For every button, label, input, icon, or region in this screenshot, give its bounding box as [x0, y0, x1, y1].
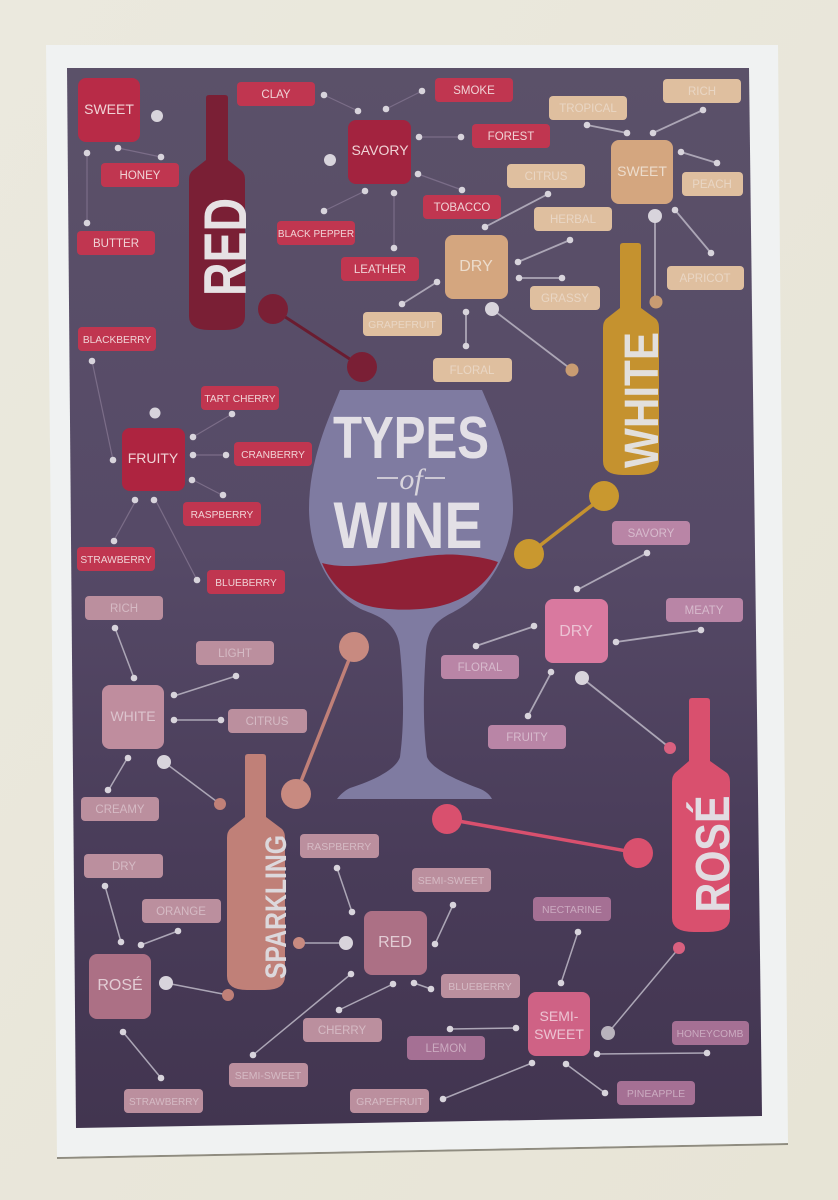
connector: rosé bottle to glass [432, 804, 653, 868]
section: sparkling wines [81, 596, 520, 1113]
tags: red notes: STRAWBERRY [80, 555, 152, 566]
tags: sparkling notes: BLUEBERRY [448, 981, 512, 993]
tags: sparkling notes [81, 596, 520, 1113]
tags: semi-sweet notes: LEMON [426, 1043, 466, 1055]
box: sweet white: SWEET [617, 163, 667, 179]
tags: white notes: GRASSY [541, 293, 589, 305]
tags: sparkling notes: DRY [112, 861, 136, 873]
tags: red notes: CRANBERRY [241, 450, 305, 461]
tags: red notes: CLAY [261, 89, 291, 101]
glass silhouette [309, 390, 513, 799]
box: red sparkling [364, 911, 427, 975]
box: sweet red [78, 78, 140, 142]
tags: red notes: LEATHER [354, 264, 406, 276]
tags: sparkling notes: STRAWBERRY [129, 1097, 199, 1108]
box: semi-sweet: SWEET [534, 1026, 584, 1042]
box: semi-sweet: SEMI- [540, 1008, 579, 1024]
tags: white notes [363, 79, 744, 382]
connectors: white notes [399, 107, 720, 376]
tags: rosé notes [441, 521, 743, 749]
title rules [377, 477, 445, 479]
tags: white notes: TROPICAL [559, 103, 617, 115]
tags: rosé notes: FLORAL [458, 662, 503, 674]
tags: semi-sweet notes: PINEAPPLE [627, 1088, 685, 1100]
tags: white notes: CITRUS [525, 171, 568, 183]
connector: red bottle to glass [258, 294, 377, 382]
tags: red notes: SMOKE [453, 85, 495, 97]
tags: sparkling notes: RASPBERRY [307, 841, 371, 853]
tags: sparkling notes: CITRUS [246, 716, 289, 728]
tags: red notes: TOBACCO [434, 202, 490, 214]
tags: white notes: RICH [688, 86, 716, 98]
bottle: white: WHITE [616, 332, 669, 468]
connector: white bottle to glass [514, 481, 619, 569]
box: savory: SAVORY [351, 142, 409, 158]
tags: white notes: PEACH [692, 179, 732, 191]
tags: red notes: TART CHERRY [204, 394, 276, 405]
connectors: rosé notes [473, 550, 704, 754]
tags: sparkling notes: SEMI-SWEET [235, 1070, 302, 1082]
tags: red notes: BLUEBERRY [215, 578, 277, 589]
section: red wines [77, 78, 550, 594]
title WINE: WINE [334, 488, 482, 562]
card shadow [57, 1144, 788, 1158]
box: red sparkling: RED [378, 934, 412, 951]
bottle: rosé [672, 698, 740, 932]
tags: red notes: BLACK PEPPER [278, 229, 354, 240]
tags: rosé notes: MEATY [685, 605, 724, 617]
wine glass with title [309, 390, 513, 799]
tags: white notes: HERBAL [550, 214, 597, 226]
tags: semi-sweet notes: NECTARINE [542, 904, 602, 916]
tags: sparkling notes: RICH [110, 603, 138, 615]
tags: red notes: BLACKBERRY [83, 335, 151, 346]
box: sweet red: SWEET [84, 101, 134, 117]
box: savory [348, 120, 411, 184]
title TYPES: TYPES [333, 405, 489, 471]
tags: red notes: FOREST [488, 131, 534, 143]
bottle: white [603, 243, 669, 475]
tags: sparkling notes: GRAPEFRUIT [356, 1096, 424, 1108]
wine fill [322, 555, 498, 610]
tags: sparkling notes: CHERRY [318, 1025, 367, 1037]
tags: red notes [77, 78, 550, 594]
bottle: rosé: ROSÉ [686, 795, 740, 912]
bottle: red: RED [192, 198, 259, 296]
tags: white notes: APRICOT [679, 273, 731, 285]
tags: semi-sweet notes [407, 897, 749, 1105]
box: semi-sweet [528, 992, 590, 1056]
section: rosé wines [407, 521, 749, 1105]
box: fruity: FRUITY [128, 450, 179, 466]
box: sweet white [611, 140, 673, 204]
box: white sparkling [102, 685, 164, 749]
connectors: sparkling notes [102, 625, 456, 1081]
tags: sparkling notes: ORANGE [156, 906, 206, 918]
tags: white notes: GRAPEFRUIT [368, 319, 436, 331]
bottle: sparkling [227, 754, 293, 990]
tags: red notes: BUTTER [93, 238, 139, 250]
tags: rosé notes: SAVORY [628, 528, 675, 540]
box: dry rosé: DRY [559, 623, 593, 640]
box: rosé sparkling: ROSÉ [97, 975, 143, 994]
tags: white notes: FLORAL [450, 365, 495, 377]
bottle: sparkling: SPARKLING [260, 835, 293, 979]
bottle: red [189, 95, 259, 330]
box: dry white [445, 235, 508, 299]
connectors: red notes [84, 88, 465, 583]
connectors: semi-sweet notes [440, 929, 710, 1102]
box: fruity [122, 428, 185, 491]
section: white wines [363, 79, 744, 569]
box: dry rosé [545, 599, 608, 663]
tags: rosé notes: FRUITY [506, 732, 548, 744]
tags: sparkling notes: CREAMY [95, 804, 145, 816]
box: dry white: DRY [459, 258, 493, 275]
tags: sparkling notes: SEMI-SWEET [418, 875, 485, 887]
tags: sparkling notes: LIGHT [218, 648, 252, 660]
tags: red notes: HONEY [120, 170, 161, 182]
box: white sparkling: WHITE [110, 708, 156, 724]
printed dark poster panel [67, 68, 762, 1128]
tags: semi-sweet notes: HONEYCOMB [677, 1029, 744, 1040]
tags: red notes: RASPBERRY [191, 510, 254, 521]
connector: sparkling bottle to glass [281, 632, 369, 809]
title of: of [399, 463, 426, 496]
box: rosé sparkling [89, 954, 151, 1019]
